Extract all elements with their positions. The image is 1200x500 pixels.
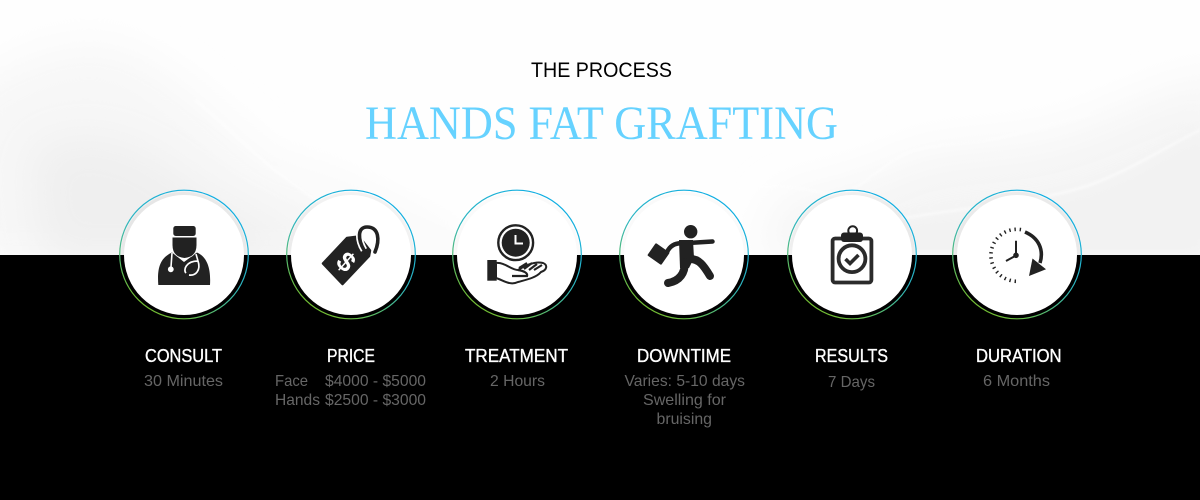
panel: treatment [453,190,581,390]
icon: hand holding clock [487,225,546,283]
badge: consult circle [120,190,248,319]
detail: downtime lines [624,373,745,428]
icon: dollar price tag [323,227,378,284]
detail: price lines: $4000 - $5000 [325,373,426,390]
title: HANDS FAT GRAFTING: HANDS FAT GRAFTING [365,97,838,150]
panel: consult [120,190,248,390]
detail: price lines: Face [275,373,308,390]
label: RESULTS: RESULTS [815,346,888,366]
icon: doctor with stethoscope [158,226,210,285]
detail: downtime lines: Swelling for [643,392,727,409]
icon: clock with circular arrow [991,229,1046,281]
icon: running businessman with briefcase [647,225,712,283]
background: white silk waves over black lower band [0,0,1200,255]
detail: downtime lines: bruising [656,411,712,428]
label: CONSULT: CONSULT [145,346,222,366]
detail: price lines: $2500 - $3000 [325,392,426,409]
detail: 6 Months: 6 Months [983,373,1050,390]
label: PRICE: PRICE [327,346,375,366]
panel: downtime [620,190,748,428]
badge: results circle [788,190,916,319]
badge: price circle [287,190,415,319]
panel: duration [953,190,1081,390]
icon: clipboard with check mark [833,226,871,282]
panel: results [788,190,916,391]
heading: THE PROCESS: THE PROCESS [531,59,672,82]
badge: treatment circle [453,190,581,319]
detail: downtime lines: Varies: 5-10 days [624,373,745,390]
detail: price lines [275,373,426,409]
panel: price [275,190,426,409]
detail: price lines: Hands [275,392,320,409]
label: TREATMENT: TREATMENT [465,346,568,366]
badge: duration circle [953,190,1081,319]
badge: downtime circle [620,190,748,319]
detail: 2 Hours: 2 Hours [490,373,545,390]
detail: 7 Days: 7 Days [828,374,875,391]
label: DURATION: DURATION [976,346,1062,366]
icon: dollar price tag: $ [330,246,362,278]
label: DOWNTIME: DOWNTIME [637,346,731,366]
detail: 30 Minutes: 30 Minutes [144,373,223,390]
